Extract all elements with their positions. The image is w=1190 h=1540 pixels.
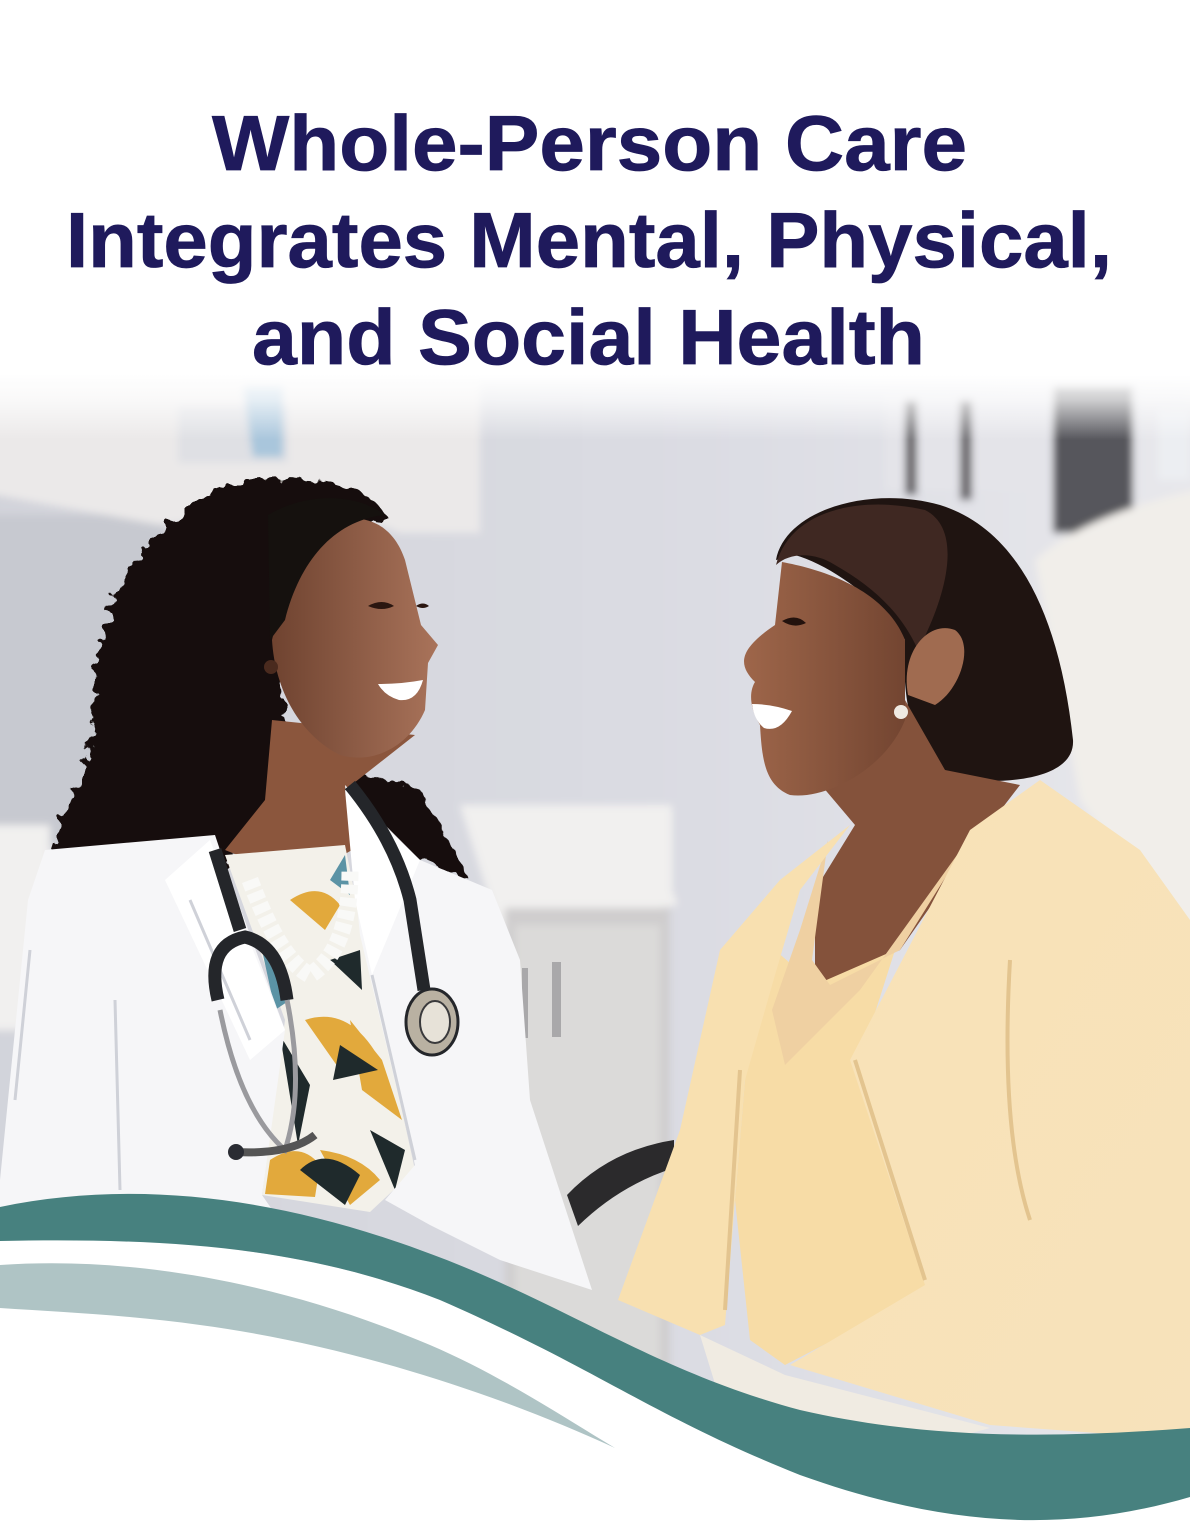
patient skirt <box>700 1335 990 1480</box>
doctor blouse <box>225 845 415 1212</box>
patient <box>618 498 1190 1480</box>
doctor eyes and smile <box>368 602 429 609</box>
patient face <box>744 562 905 796</box>
patient hair <box>776 498 1073 781</box>
chair arm <box>567 1140 674 1226</box>
stethoscope <box>215 785 458 1160</box>
patient cardigan folds <box>725 960 1030 1310</box>
patient lace collar <box>772 830 975 1065</box>
patient sweater <box>735 950 930 1365</box>
cabinet handle <box>522 962 561 1038</box>
exam room background <box>0 375 1190 1475</box>
doctor face <box>272 519 438 758</box>
patient cardigan body <box>790 780 1190 1440</box>
white base below the wave <box>0 1240 1190 1540</box>
wave: light stripe <box>0 1263 615 1448</box>
doctor necklace <box>250 870 350 975</box>
patient neck <box>800 700 1020 985</box>
doctor hairline <box>268 498 385 640</box>
doctor <box>0 478 592 1290</box>
title: Integrates Mental, Physical, <box>66 196 1112 284</box>
fade into white behind the title <box>0 340 1190 375</box>
patient eye and mouth <box>782 617 806 626</box>
doctor hair <box>50 478 470 900</box>
patient bangs <box>776 505 948 650</box>
title: and Social Health <box>252 293 925 381</box>
title: Whole-Person Care <box>212 99 967 187</box>
patient ear and earring <box>907 628 964 705</box>
doctor white coat <box>0 785 592 1290</box>
title <box>66 99 1112 381</box>
patient cardigan left side <box>618 825 850 1335</box>
doctor earring <box>264 660 278 674</box>
doctor neck <box>225 720 415 880</box>
photo: doctor and patient in exam room <box>0 375 1190 1480</box>
wave: teal band <box>0 1194 1190 1520</box>
